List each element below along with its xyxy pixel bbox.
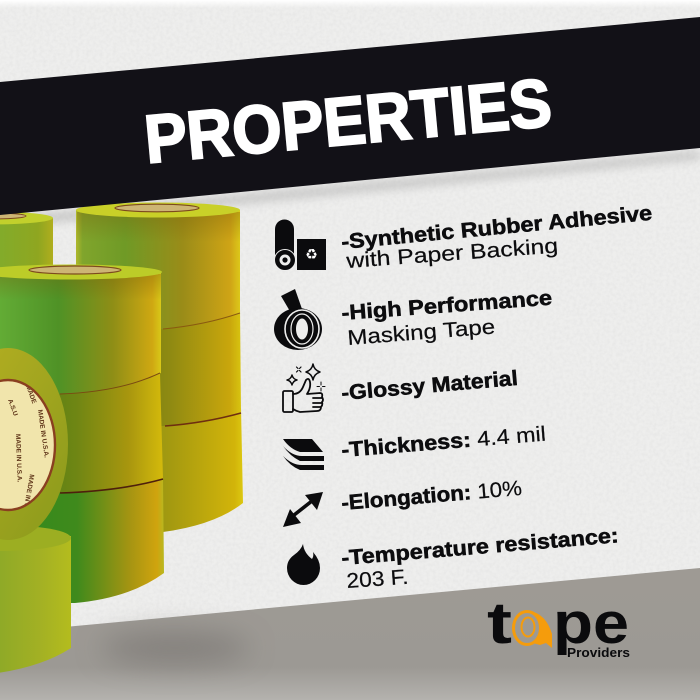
- icon: diagonal double arrow: [283, 492, 323, 527]
- text: elongation: -Elongation: 10%: [340, 477, 523, 515]
- banner shadow: [0, 152, 700, 226]
- banner: [0, 17, 700, 215]
- inner core label text: MADE IN U.S.A.: [46, 399, 63, 448]
- tape roll: bottom: [0, 525, 71, 674]
- text: synthetic rubber adhesive: -Synthetic Rubber Adhesive: [340, 202, 653, 254]
- text: thickness: -Thickness: 4.4 mil: [341, 423, 547, 462]
- icon: flame: [287, 544, 320, 585]
- tape stack: back right: [76, 202, 243, 532]
- logo: tape providers: Providers: [567, 646, 630, 660]
- tape roll: face-on: [0, 348, 68, 540]
- text: high performance: [341, 287, 553, 350]
- tape stack: back left: [0, 212, 53, 272]
- inner core label text: MADE IN U.S.A.: [14, 434, 23, 483]
- floor: [0, 568, 700, 700]
- logo: tape providers: e: [593, 591, 629, 656]
- tape rolls photo: [0, 202, 243, 674]
- inner core label text: [8, 386, 49, 504]
- text: synthetic rubber adhesive: with Paper Backing: [345, 235, 559, 273]
- text: temperature resistance: [341, 524, 619, 593]
- icon: paper roll with recycling box: ♻: [305, 247, 318, 263]
- inner core label text: A.S.U: [6, 398, 19, 417]
- text: temperature resistance: 203 F.: [346, 566, 409, 593]
- logo: tape providers: p: [553, 591, 593, 656]
- tape stack: front: [0, 264, 164, 603]
- text: glossy material: -Glossy Material: [340, 367, 519, 405]
- title: PROPERTIES: [141, 65, 555, 178]
- icon: orange tape letter a: [514, 611, 552, 648]
- icon: tape roll: [274, 289, 322, 350]
- text: high performance: -High Performance: [341, 287, 553, 325]
- icon: stacked layers: [283, 439, 324, 470]
- inner core label text: MADE: [24, 384, 37, 405]
- inner core label text: MADE IN U.S.A.: [36, 409, 50, 458]
- inner core label text: MADE IN U.S.A.: [20, 474, 35, 523]
- icon: paper roll with recycling box: [274, 220, 326, 270]
- text: temperature resistance: -Temperature resistance:: [341, 524, 619, 570]
- logo: tape providers: [487, 591, 630, 660]
- text: high performance: Masking Tape: [347, 315, 496, 350]
- text: synthetic rubber adhesive: [340, 202, 653, 273]
- logo: tape providers: t: [487, 591, 512, 656]
- icon: thumbs up with sparkles: [283, 364, 325, 412]
